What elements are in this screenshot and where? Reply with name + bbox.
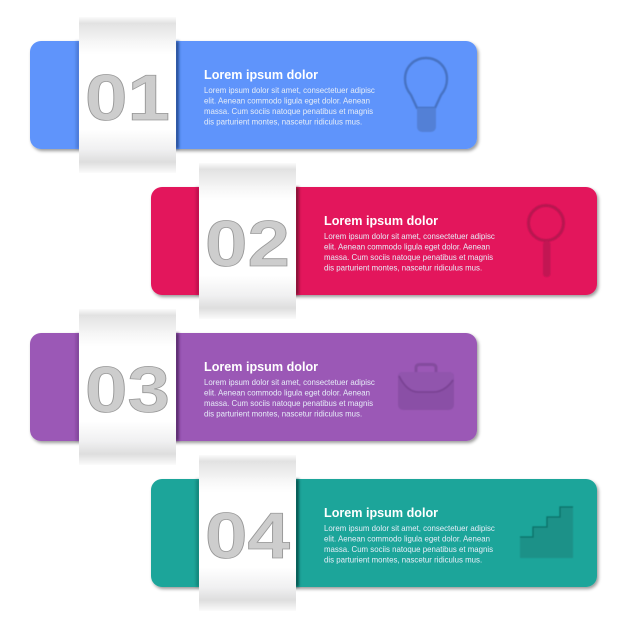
body text [324, 232, 495, 272]
body text: massa. Cum sociis natoque penatibus et magnis [204, 399, 373, 408]
panel: step 02 [151, 163, 597, 319]
body text: dis parturient montes, nascetur ridiculus mus. [204, 410, 362, 418]
teal bar [151, 479, 597, 587]
body text: elit. Aenean commodo ligula eget dolor. Aenean [324, 534, 490, 544]
body text [204, 86, 375, 126]
body text [204, 378, 375, 418]
body text: dis parturient montes, nascetur ridiculus mus. [324, 556, 482, 564]
body text: Lorem ipsum dolor sit amet, consectetuer adipisc [324, 524, 495, 533]
body text: dis parturient montes, nascetur ridiculus mus. [324, 264, 482, 272]
body text: dis parturient montes, nascetur ridiculus mus. [204, 118, 362, 126]
number 01: 01 [85, 61, 170, 134]
band shadows [196, 479, 299, 587]
body text [324, 524, 495, 564]
body text: Lorem ipsum dolor sit amet, consectetuer adipisc [204, 86, 375, 95]
body text: massa. Cum sociis natoque penatibus et magnis [324, 253, 493, 262]
band shadows [76, 333, 179, 441]
crimson bar [151, 187, 597, 295]
icon: briefcase [398, 364, 454, 410]
icon: light bulb [405, 58, 447, 132]
number 04: 04 [205, 499, 290, 572]
body text: Lorem ipsum dolor sit amet, consectetuer adipisc [324, 232, 495, 241]
body text: elit. Aenean commodo ligula eget dolor. Aenean [204, 96, 370, 106]
panel: step 03 [30, 309, 477, 465]
body text: Lorem ipsum dolor sit amet, consectetuer adipisc [204, 378, 375, 387]
body text: massa. Cum sociis natoque penatibus et magnis [204, 107, 373, 116]
icon: stairs [520, 507, 573, 558]
number 03: 03 [85, 353, 170, 426]
band shadows [196, 187, 299, 295]
panel: step 01 [30, 17, 477, 173]
heading: Lorem ipsum dolor [324, 506, 438, 520]
heading: Lorem ipsum dolor [204, 68, 318, 82]
heading: Lorem ipsum dolor [204, 360, 318, 374]
body text: elit. Aenean commodo ligula eget dolor. Aenean [324, 242, 490, 252]
blue bar [30, 41, 477, 149]
body text: elit. Aenean commodo ligula eget dolor. Aenean [204, 388, 370, 398]
panel: step 04 [151, 455, 597, 611]
icon: magnifying glass [528, 206, 564, 277]
white band [79, 309, 176, 465]
body text: massa. Cum sociis natoque penatibus et magnis [324, 545, 493, 554]
white band [199, 455, 296, 611]
band shadows [76, 41, 179, 149]
purple bar [30, 333, 477, 441]
white band [199, 163, 296, 319]
number 02: 02 [205, 207, 290, 280]
white band [79, 17, 176, 173]
heading: Lorem ipsum dolor [324, 214, 438, 228]
